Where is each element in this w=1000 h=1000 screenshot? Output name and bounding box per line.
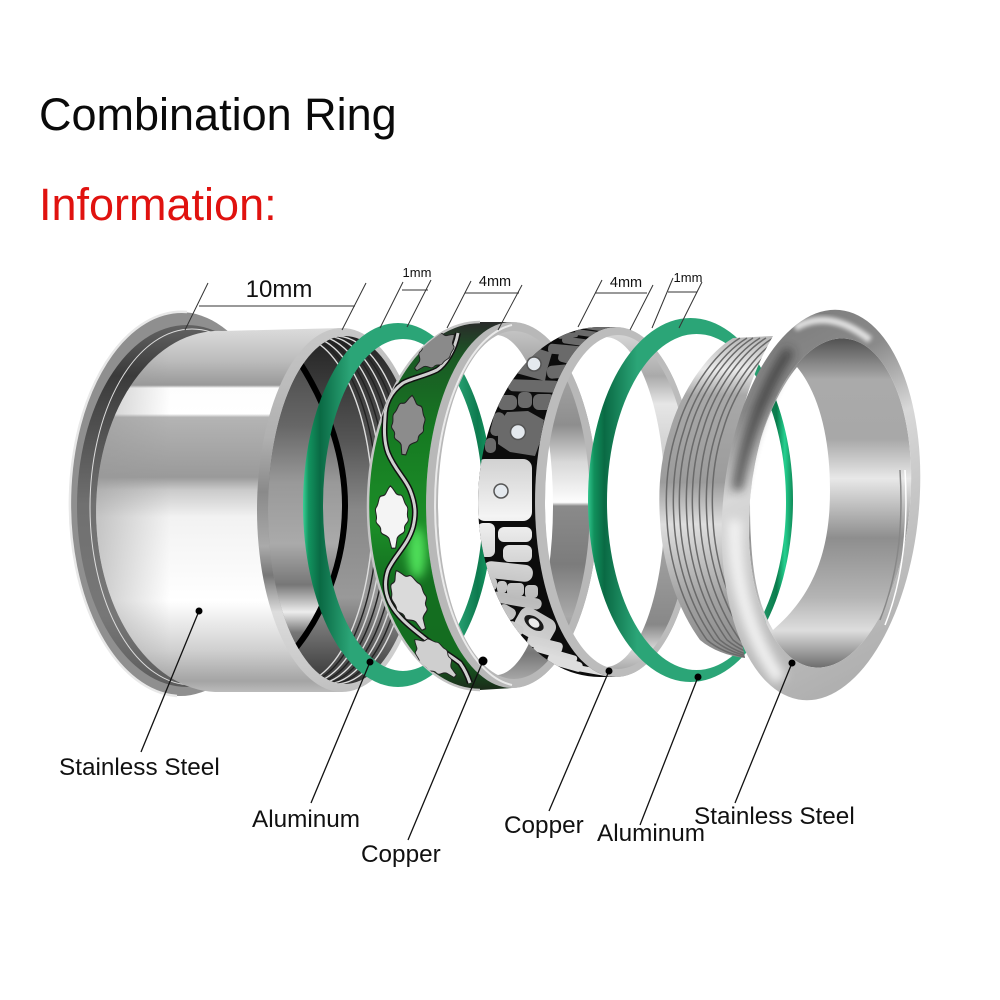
- thread lines: [666, 338, 772, 658]
- callout: aluminum left: [252, 658, 374, 833]
- ring 5: green aluminum ring: [588, 318, 793, 682]
- inner surface: [749, 338, 911, 668]
- ring 1: stainless steel cylinder: [70, 312, 430, 696]
- ring 7: stainless steel domed ring: [722, 310, 920, 700]
- gemstones: [494, 357, 541, 498]
- ring 6: threaded stainless steel section: [659, 336, 773, 658]
- front rim: [257, 328, 427, 692]
- black band: [478, 327, 616, 677]
- dimension: 4mm right: 4mm: [610, 275, 642, 291]
- dimension: 4mm left: 4mm: [479, 274, 511, 290]
- title: Combination Ring: [39, 89, 397, 140]
- dimension: 4mm left: [447, 274, 522, 330]
- silver rim: [426, 322, 598, 688]
- inner surface: [535, 327, 697, 677]
- inner surface: [426, 322, 598, 688]
- ring 4: copper ring with black stones: [476, 323, 697, 677]
- callout: aluminum right: [597, 674, 705, 847]
- stones: [476, 323, 618, 677]
- threaded interior: [268, 336, 398, 684]
- flange of cylinder: [70, 312, 297, 696]
- callout: stainless steel right: Stainless Steel: [694, 803, 855, 830]
- enamel band: [368, 322, 512, 690]
- dimension: 10mm: 10mm: [246, 276, 312, 303]
- dimension: 10mm: [185, 276, 366, 330]
- silver rim: [535, 327, 697, 677]
- cylinder body: [96, 328, 342, 692]
- dome shading: [735, 320, 906, 680]
- callout: copper left: [361, 656, 488, 868]
- dimension: 4mm right: [578, 275, 653, 330]
- callout: aluminum left: Aluminum: [252, 806, 360, 833]
- callout: copper left: Copper: [361, 841, 441, 868]
- dimension: 1mm left: [380, 265, 431, 328]
- callout: copper right: Copper: [504, 812, 584, 839]
- callout: copper right: [504, 668, 612, 839]
- vine and leaves: [374, 324, 470, 686]
- dimension: 1mm right: [652, 270, 702, 328]
- callout: aluminum right: Aluminum: [597, 820, 705, 847]
- domed band: [722, 310, 920, 700]
- callout: stainless steel right: [694, 660, 855, 830]
- dimension: 1mm right: 1mm: [674, 270, 702, 285]
- ring 2: green aluminum ring: [303, 323, 493, 687]
- ring 3: copper ring with green enamel and vine: [368, 322, 598, 690]
- callout: stainless steel left: Stainless Steel: [59, 754, 220, 781]
- dimension: 1mm left: 1mm: [403, 265, 431, 280]
- callout: stainless steel left: [59, 608, 220, 781]
- heading: information: Information:: [39, 179, 277, 230]
